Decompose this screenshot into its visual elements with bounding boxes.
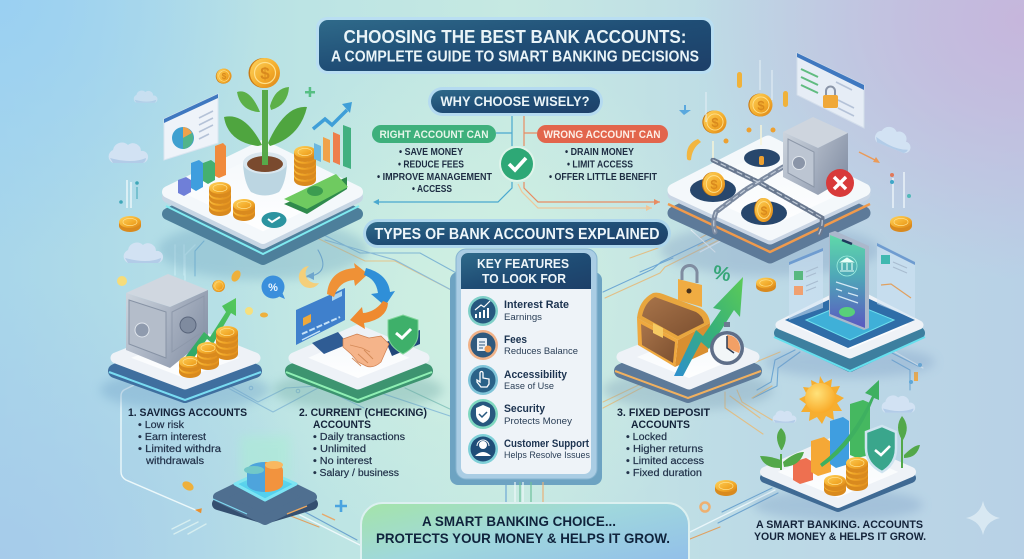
text: savings accounts: 1. SAVINGS ACCOUNTS	[128, 407, 247, 419]
chains	[713, 160, 822, 234]
feature: interest rate: Interest Rate	[504, 299, 569, 311]
platform: mobile banking	[765, 231, 935, 378]
feature: fees	[504, 334, 578, 356]
bars on platform	[178, 143, 226, 196]
coin holes	[690, 149, 787, 225]
treasure chest	[637, 293, 710, 367]
cloud, coin and indicators	[859, 123, 915, 232]
text: savings accounts: • Limited withdra	[138, 444, 221, 455]
text: bottom right caption: A SMART BANKING. ACCOUNTS	[756, 519, 923, 531]
label: right account can	[372, 125, 496, 143]
falling coins: $	[757, 98, 765, 113]
list: right account benefits: • SAVE MONEY	[399, 147, 463, 158]
red cross badge	[826, 169, 854, 197]
icon: security	[468, 399, 498, 429]
platform: locked account	[660, 53, 915, 276]
credit card	[296, 288, 345, 345]
green arrow	[820, 380, 879, 467]
feature: customer support	[504, 438, 590, 460]
plant pot with coin	[214, 58, 307, 196]
lock window	[797, 53, 864, 128]
coins near fixed deposit	[700, 278, 776, 512]
text: current accounts: • No interest	[313, 456, 372, 467]
floating coins and percent bubble	[117, 266, 319, 318]
title: A COMPLETE GUIDE TO SMART BANKING DECISIONS	[331, 48, 699, 66]
feature: security	[504, 403, 573, 426]
falling coins: $	[711, 115, 719, 130]
percent sign: %	[711, 262, 733, 286]
feature: security: Security	[504, 403, 546, 415]
falling coins	[687, 60, 788, 160]
feature: accessibility: Accessibility	[504, 369, 568, 381]
label: wrong account can	[537, 125, 668, 143]
shield check	[388, 315, 418, 354]
title: CHOOSING THE BEST BANK ACCOUNTS:	[344, 27, 686, 47]
heading: types of bank accounts	[363, 219, 671, 248]
feature: fees: Fees	[504, 334, 527, 346]
coins stack and shield	[824, 426, 896, 496]
text: fixed deposit accounts: • Limited access	[626, 456, 704, 467]
connector lines above banner	[506, 482, 543, 503]
text: current accounts: • Unlimited	[313, 444, 366, 455]
panel header	[461, 253, 591, 289]
smartphone	[829, 231, 869, 330]
heading: why choose wisely: WHY CHOOSE WISELY?	[440, 94, 590, 109]
platform: fixed deposit	[603, 262, 773, 410]
floating coins and percent bubble: %	[268, 282, 278, 294]
bars	[793, 400, 870, 484]
list: wrong account risks: • LIMIT ACCESS	[567, 160, 633, 170]
text: current accounts: ACCOUNTS	[313, 419, 371, 431]
icon: interest rate	[468, 296, 498, 326]
safe	[783, 117, 848, 195]
text: savings accounts: • Earn interest	[138, 432, 206, 443]
feature: interest rate: Earnings	[504, 312, 543, 322]
icon: customer support	[468, 434, 498, 464]
text: current accounts	[299, 407, 427, 479]
list: right account benefits: • ACCESS	[412, 184, 452, 195]
icon: fees	[468, 330, 498, 360]
panel header: TO LOOK FOR	[482, 271, 567, 286]
icon: accessibility	[468, 365, 498, 395]
holographic screens	[789, 243, 915, 320]
clouds and small coin	[109, 91, 163, 263]
clouds	[773, 395, 915, 423]
platform: savings accounts	[100, 274, 270, 410]
pie chart window	[164, 94, 218, 160]
plant pot with coin: $	[222, 72, 227, 81]
heading: types of bank accounts: TYPES OF BANK ACCOUNTS EXPLAINED	[374, 226, 660, 243]
growth arrow	[183, 298, 236, 362]
coin stacks	[209, 146, 316, 221]
text: bottom right caption	[754, 519, 926, 543]
banner: smart banking choice: A SMART BANKING CHOICE...	[422, 513, 616, 529]
list: right account benefits: • IMPROVE MANAGEMENT	[377, 172, 492, 183]
list: wrong account risks: • OFFER LITTLE BENEFIT	[549, 172, 657, 183]
list: right account benefits: • REDUCE FEES	[398, 160, 464, 170]
stopwatch	[710, 322, 744, 365]
text: savings accounts	[128, 407, 247, 467]
text: fixed deposit accounts: • Higher returns	[626, 444, 703, 455]
plant pot with coin: $	[260, 64, 270, 83]
connector dots and arrowheads	[194, 272, 922, 513]
plants	[760, 416, 920, 470]
coin holes: $	[761, 204, 768, 218]
feature: accessibility: Ease of Use	[504, 381, 554, 391]
label: wrong account can: WRONG ACCOUNT CAN	[544, 129, 661, 141]
icon: green check	[499, 146, 535, 182]
platform: growth plant	[109, 58, 368, 280]
panel header: KEY FEATURES	[477, 256, 569, 271]
why choose connector lines	[373, 116, 660, 211]
label: right account can: RIGHT ACCOUNT CAN	[380, 129, 489, 141]
list: wrong account risks	[549, 147, 657, 183]
feature: accessibility	[504, 369, 568, 391]
list: right account benefits	[377, 147, 492, 195]
padlock	[678, 265, 702, 307]
text: current accounts: • Salary / business	[313, 468, 399, 479]
platform: center data block	[213, 436, 312, 520]
corner sparkle star	[966, 501, 1000, 535]
text: fixed deposit accounts: • Fixed duration	[626, 468, 702, 479]
text: savings accounts: • Low risk	[138, 420, 185, 431]
platform: current accounts	[273, 263, 443, 410]
sun	[799, 376, 844, 424]
list: wrong account risks: • DRAIN MONEY	[565, 147, 634, 158]
arms and handshake	[312, 330, 420, 367]
panel: key features	[450, 249, 602, 485]
feature: interest rate	[504, 299, 569, 322]
green growth arrow	[674, 277, 743, 376]
text: current accounts: 2. CURRENT (CHECKING)	[299, 407, 427, 419]
banknotes	[284, 174, 348, 214]
text: fixed deposit accounts: ACCOUNTS	[631, 419, 690, 431]
cylinder	[244, 461, 283, 492]
cycle arrows	[327, 263, 395, 329]
text: fixed deposit accounts: • Locked	[626, 432, 667, 443]
feature: customer support: Customer Support	[504, 438, 589, 450]
platform: growth chart	[753, 376, 923, 521]
heading: why choose wisely	[428, 87, 603, 116]
check badge	[262, 212, 286, 228]
coin holes: $	[710, 177, 718, 192]
banner: smart banking choice: PROTECTS YOUR MONEY & HELPS IT GROW.	[376, 530, 670, 546]
feature: customer support: Helps Resolve Issues	[504, 450, 590, 460]
text: bottom right caption: YOUR MONEY & HELPS IT GROW.	[754, 531, 926, 543]
coin stacks	[179, 326, 238, 378]
small coin and plus	[181, 480, 347, 520]
feature: fees: Reduces Balance	[504, 346, 578, 356]
text: savings accounts: withdrawals	[145, 456, 204, 467]
circuit lines: connectors	[121, 222, 923, 545]
text: fixed deposit accounts: 3. FIXED DEPOSIT	[617, 407, 710, 419]
feature: security: Protects Money	[504, 416, 573, 426]
title	[316, 17, 714, 74]
sparkle plus	[305, 87, 315, 97]
mini chart with arrow	[313, 102, 352, 169]
text: current accounts: • Daily transactions	[313, 432, 405, 443]
safe	[126, 274, 208, 368]
light beams	[240, 436, 290, 480]
text: fixed deposit accounts	[617, 407, 710, 479]
down arrow	[679, 105, 691, 115]
banner: smart banking choice	[361, 503, 689, 559]
